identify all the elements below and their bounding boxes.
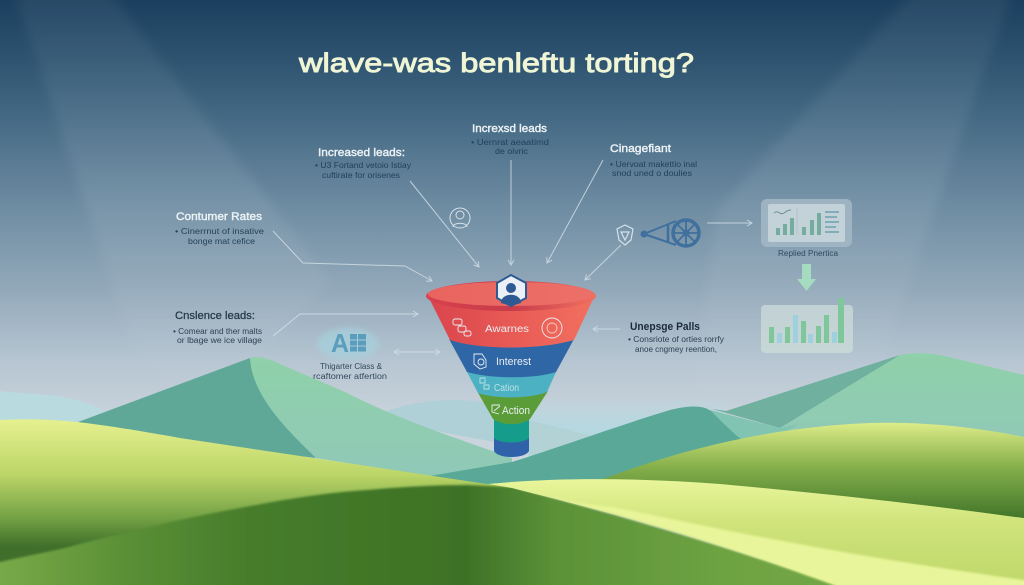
funnel labels — [485, 324, 531, 417]
connector arrows — [273, 160, 752, 352]
text block: Increased leads (left) — [315, 147, 411, 180]
text block: Increased leads (centre): Increxsd leads — [472, 123, 548, 135]
funnel segment icons — [453, 318, 562, 414]
text block: Increased leads (left): Increased leads: — [318, 147, 405, 159]
text block: Increased leads (centre): • Uernrat aeaatimd — [471, 138, 549, 147]
title: wlave-was benleftu torting? — [298, 48, 694, 78]
text block: Increased leads (centre): de oivric — [495, 147, 528, 156]
text block: Contumer Rates: bonge mat cefice — [188, 237, 256, 246]
text block: Increased leads (centre) — [471, 123, 549, 156]
icon: AI badge — [317, 328, 379, 360]
text block: Unepsge Palls: • Consriote of orties rorrfy — [628, 335, 724, 344]
funnel segment: awareness — [427, 294, 595, 348]
text block: Unepsge Palls — [628, 321, 724, 354]
funnel labels: Interest — [496, 356, 531, 368]
dashboard: bottom bar chart — [761, 298, 853, 353]
dashboard: top analytics panel — [761, 199, 852, 247]
caption: Thigarter Class: Thigarter Class & — [320, 362, 383, 371]
text block: Contumer Rates: • Cinerrnut of insative — [175, 227, 265, 236]
funnel segment: consideration — [466, 370, 557, 397]
text block: Cnslence leads: • Comear and ther malts — [173, 327, 262, 336]
text block: Contumer Rates — [175, 211, 265, 246]
caption: Thigarter Class — [313, 362, 387, 381]
caption: Replied Pnertica: Replied Pnertica — [778, 249, 839, 258]
icon: blue wheel with belt — [641, 220, 699, 246]
funnel hexagon avatar — [497, 275, 526, 306]
funnel labels: Action — [502, 405, 530, 417]
icon: gem shield — [617, 225, 633, 245]
text block: Increased leads (left): • U3 Fortand vetoio Istiay — [315, 161, 411, 170]
text block: Increased leads (left): cuftirate for orisenes — [322, 171, 400, 180]
funnel labels: Awarnes — [485, 324, 529, 335]
text block: Unepsge Palls: Unepsge Palls — [630, 321, 700, 333]
landscape: rolling hills — [0, 353, 1024, 585]
text block: Cinagefiant: snod uned o doulies — [612, 169, 692, 178]
icon: AI badge: A — [331, 328, 349, 358]
text block: Cinagefiant: • Uervoat makettio inal — [610, 160, 697, 169]
funnel stem — [494, 418, 529, 457]
funnel segment: action — [477, 391, 548, 424]
funnel segment: interest — [449, 339, 574, 377]
funnel — [426, 275, 596, 457]
text block: Contumer Rates: Contumer Rates — [176, 211, 263, 223]
text block: Cnslence leads — [173, 310, 263, 345]
text block: Unepsge Palls: anoe cngmey reention, — [635, 345, 717, 354]
caption: Thigarter Class: rcaftomer atfertion — [313, 372, 387, 381]
text block: Cnslence leads: Cnslence leads: — [175, 310, 255, 322]
arrow: green down — [797, 264, 816, 291]
text block: Cinagefiant: Cinagefiant — [610, 143, 671, 155]
funnel labels: Cation — [494, 383, 519, 394]
icon: person outline — [450, 208, 470, 228]
funnel rim — [426, 281, 596, 311]
text block: Cinagefiant — [610, 143, 697, 178]
text block: Cnslence leads: or lbage we ice village — [177, 336, 263, 345]
